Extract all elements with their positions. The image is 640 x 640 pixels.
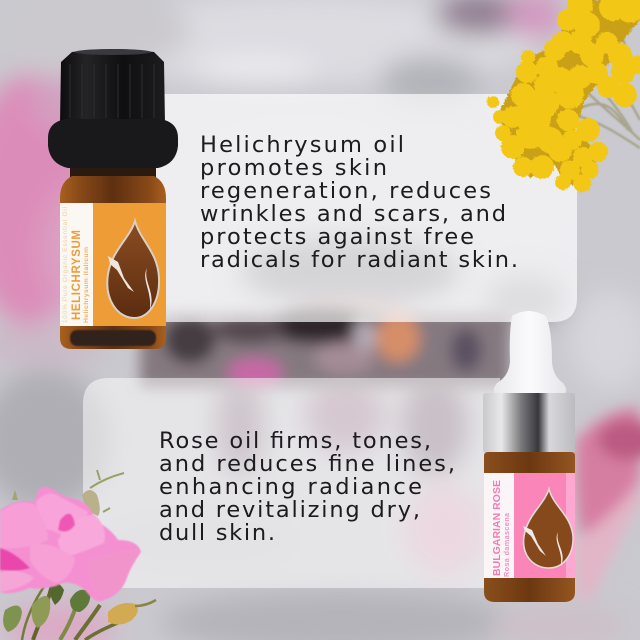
text block: rose benefits: and revitalizing dry, [159, 497, 420, 523]
text block: rose benefits: dull skin. [159, 520, 275, 546]
rose bud right [108, 603, 138, 625]
icon: oil drop [523, 489, 573, 568]
rose petals [0, 487, 141, 601]
cap opening [75, 49, 151, 55]
text block: helichrysum benefits [200, 132, 518, 273]
glass neck [70, 160, 156, 185]
cap top [60, 49, 165, 124]
white label strip [484, 473, 514, 578]
bottle base shadow [70, 330, 156, 346]
panel: helichrysum text card [150, 94, 577, 322]
text block: helichrysum benefits: promotes skin [200, 155, 387, 181]
text block: helichrysum benefits: wrinkles and scars, and [200, 201, 506, 227]
bottle: helichrysum [48, 49, 178, 349]
text block: rose benefits [159, 428, 455, 546]
dropper bulb [494, 311, 566, 396]
text block: helichrysum benefits: protects against free [200, 224, 474, 250]
stems [578, 30, 640, 148]
dark band between the two cards [140, 308, 510, 388]
illustration: yellow helichrysum flowers [487, 0, 640, 192]
panel: rose text card [83, 378, 500, 588]
stems and leaves [3, 582, 120, 640]
pink swirl right [575, 408, 640, 600]
white label strip [60, 203, 93, 326]
icon: oil drop [107, 221, 159, 318]
text block: helichrysum benefits: Helichrysum oil [200, 132, 404, 158]
text block: rose benefits: and reduces fine lines, [159, 451, 455, 477]
upper bud with sepals [82, 490, 100, 516]
bottle: bulgarian rose [483, 311, 575, 602]
label text: latin name: Rosa damascena [502, 512, 511, 577]
label text: name: BULGARIAN ROSE [491, 480, 503, 576]
text block: rose benefits: Rose oil firms, tones, [159, 428, 431, 454]
glass body [484, 452, 575, 602]
label text: purity line: 100% Pure Organic Essential Oil [62, 207, 69, 323]
illustration: pink rose [0, 470, 156, 640]
label text: name: HELICHRYSUM [71, 230, 83, 320]
glass body [60, 176, 166, 349]
text block: helichrysum benefits: regeneration, reduces [200, 178, 491, 204]
silver collar [483, 393, 575, 453]
light band on label [566, 473, 575, 578]
flower mass and heads [487, 0, 640, 192]
orange label [60, 203, 166, 326]
cap ribs [70, 64, 154, 118]
cap collar [48, 119, 178, 168]
text block: helichrysum benefits: radicals for radiant skin. [200, 247, 518, 273]
pink label [484, 473, 575, 578]
label text: latin name: Helichrysum italicum [83, 247, 90, 323]
text block: rose benefits: enhancing radiance [159, 474, 422, 500]
